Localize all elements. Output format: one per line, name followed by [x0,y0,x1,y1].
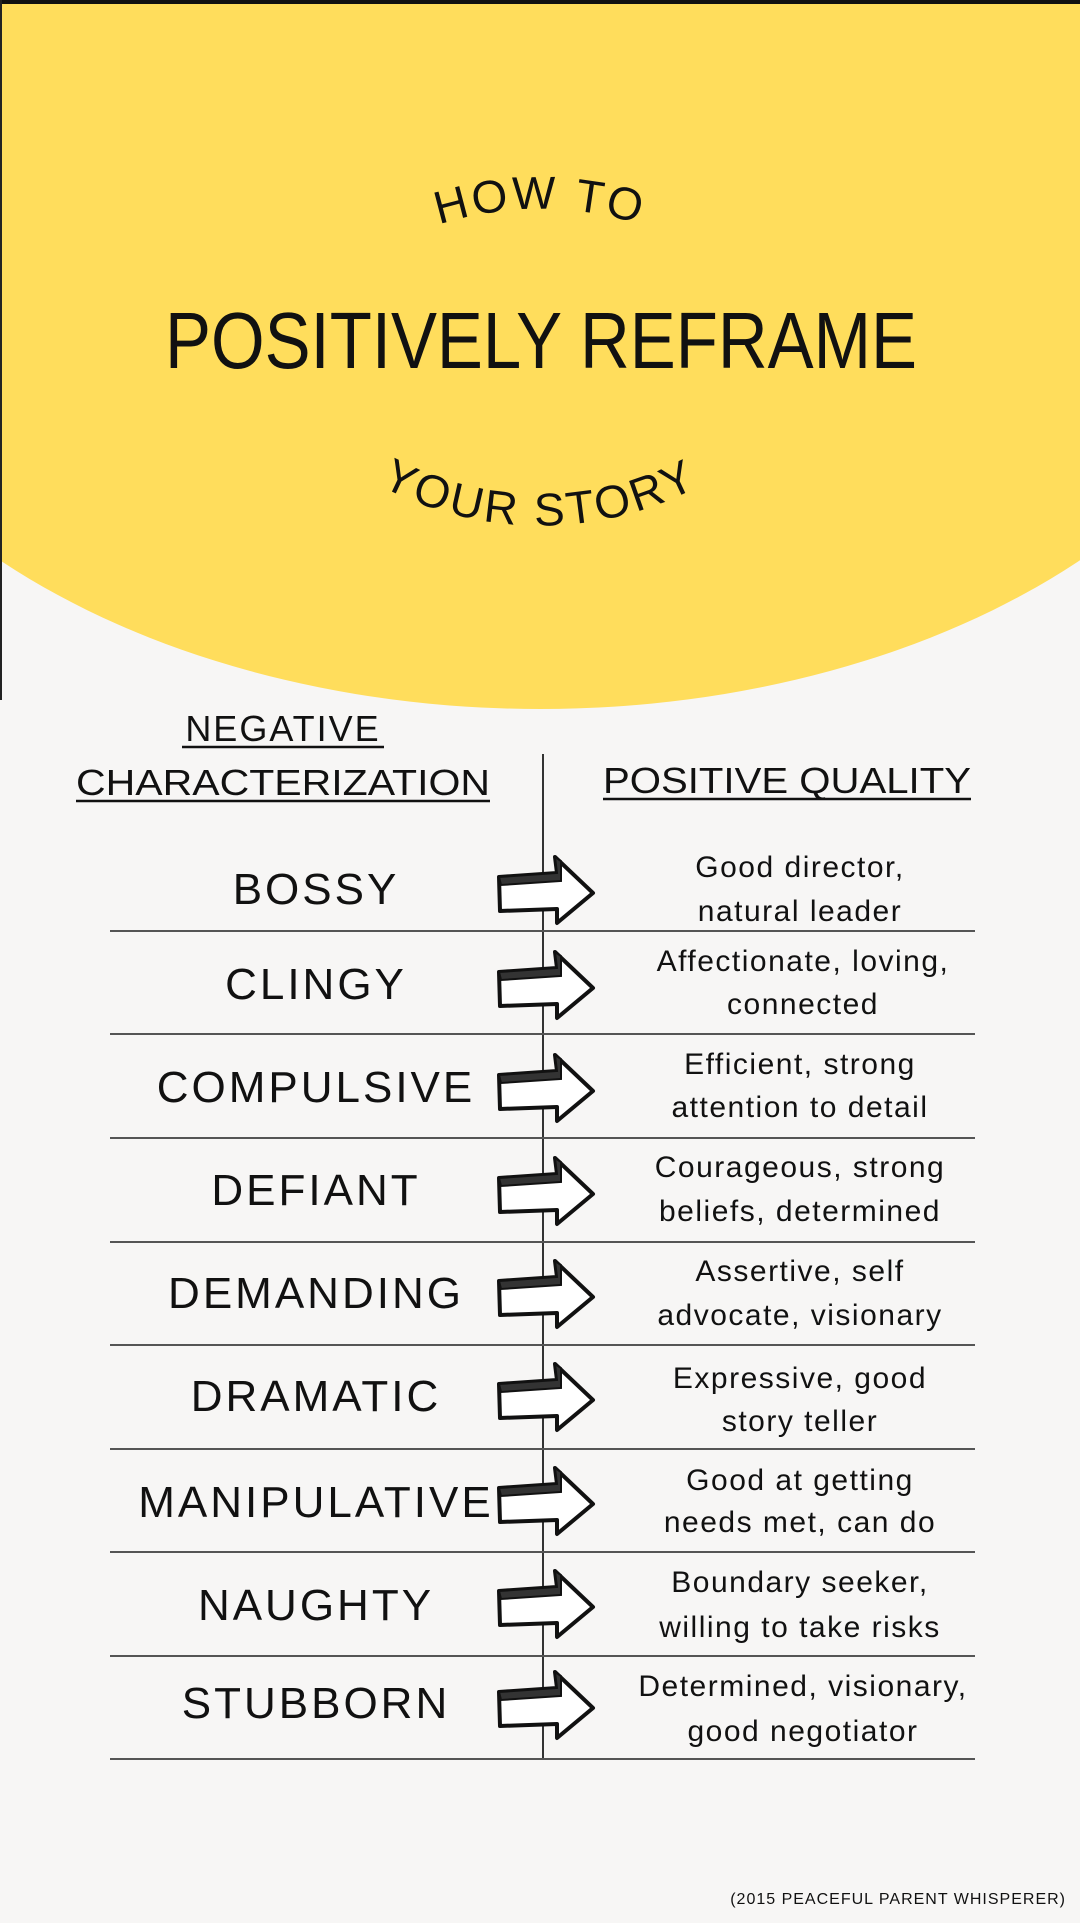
positive qualities: beliefs, determined [659,1195,941,1228]
positive qualities: attention to detail [671,1091,929,1124]
positive qualities: connected [727,988,879,1021]
divider lines [542,754,544,1759]
footer credit: (2015 PEACEFUL PARENT WHISPERER) [730,1891,1066,1908]
positive qualities: advocate, visionary [657,1299,943,1332]
header: negative characterization: NEGATIVE [185,708,381,749]
negative labels: DEMANDING [168,1269,464,1318]
positive qualities: Assertive, self [695,1255,905,1288]
title: positively reframe: POSITIVELY REFRAME [165,296,917,385]
positive qualities: Courageous, strong [655,1151,945,1184]
header: negative characterization [76,708,490,803]
positive qualities: Efficient, strong [684,1048,916,1081]
negative labels: DRAMATIC [191,1372,441,1421]
negative labels [138,865,494,1728]
positive qualities: Expressive, good [673,1362,927,1395]
positive qualities: Good at getting [686,1464,914,1497]
title: how to: HOW TO [434,176,641,224]
positive qualities: Determined, visionary, [638,1670,968,1703]
title: your story: YOUR STORY [392,458,686,526]
positive qualities: natural leader [698,895,902,928]
negative labels: COMPULSIVE [157,1063,475,1112]
positive qualities: Boundary seeker, [671,1566,929,1599]
negative labels: NAUGHTY [198,1581,434,1630]
arrows [499,857,593,1738]
positive qualities: willing to take risks [658,1611,941,1644]
positive qualities: Affectionate, loving, [657,945,949,978]
positive qualities: needs met, can do [664,1506,936,1539]
positive qualities: Good director, [695,851,905,884]
negative labels: DEFIANT [211,1166,421,1215]
negative labels: CLINGY [225,960,407,1009]
yellow header shape [0,0,1080,709]
negative labels: BOSSY [233,865,399,914]
negative labels: STUBBORN [182,1679,450,1728]
positive qualities [638,851,968,1748]
positive qualities: story teller [722,1405,878,1438]
positive qualities: good negotiator [687,1715,919,1748]
header: positive quality: POSITIVE QUALITY [603,760,971,801]
header: negative characterization: CHARACTERIZATION [76,762,490,803]
negative labels: MANIPULATIVE [138,1478,494,1527]
